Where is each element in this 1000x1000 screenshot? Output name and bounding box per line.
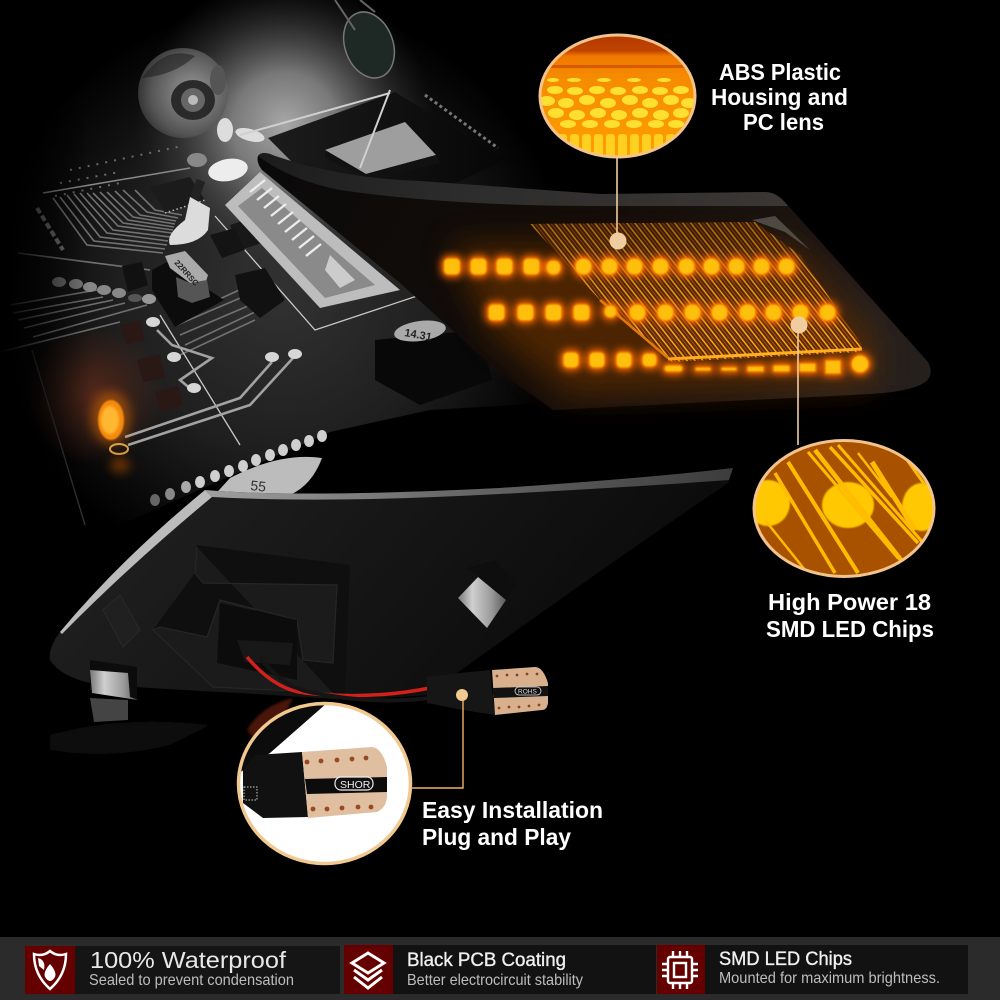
large IC with comb: [225, 172, 400, 308]
callout: LED chip zoom: [752, 439, 936, 578]
amber ambient glow: [450, 245, 875, 395]
"14.31" crystal: 14.31: [403, 327, 433, 344]
label: Easy Installation: Plug and Play: [422, 824, 571, 850]
top lamp: front with amber LEDs: [258, 153, 931, 410]
callout line: plug: [411, 689, 468, 788]
side marker strip: [37, 208, 63, 250]
feature: PCB: Better electrocircuit stability: [407, 972, 583, 989]
icon: chip: [662, 951, 698, 989]
chevron traces: [18, 190, 182, 270]
upper band: [258, 153, 788, 206]
circuit board background photo: [0, 0, 600, 560]
robot: [138, 48, 266, 245]
feature: SMD: [657, 945, 968, 994]
black mask below board: [120, 400, 600, 560]
crystal: [152, 251, 224, 327]
LED chips: [444, 259, 868, 373]
callout line: housing: [610, 157, 626, 250]
cables and upper chip: [240, 0, 498, 180]
small amber LED on board: [91, 391, 131, 473]
feature: SMD: Mounted for maximum brightness.: [719, 970, 940, 987]
small components: [120, 215, 492, 412]
crystal: 22RRSC: [173, 258, 200, 288]
lower traces: [0, 286, 255, 355]
label: ABS Plastic: PC lens: [743, 109, 824, 135]
left tab: [103, 595, 140, 647]
feature: waterproof: [25, 946, 340, 994]
feature: SMD: SMD LED Chips: [719, 949, 852, 970]
dark plate under chip: [268, 92, 505, 195]
feature: waterproof: 100% Waterproof: [90, 947, 287, 973]
wire harness: [247, 657, 430, 700]
trace to LED: [125, 330, 293, 445]
lower metal clip: [90, 670, 138, 722]
rear lamp housing: [50, 468, 733, 754]
callout: plug zoom: SHOR: [340, 779, 371, 791]
feature: waterproof: Sealed to prevent condensation: [89, 972, 294, 989]
connector block: [153, 545, 350, 695]
label: High Power 18: SMD LED Chips: [766, 616, 934, 642]
label tag "55": [210, 457, 322, 500]
row of pads: [150, 430, 327, 506]
clip holder: [90, 660, 137, 700]
feature: PCB: Black PCB Coating: [407, 950, 566, 971]
label: High Power 18: [766, 589, 934, 642]
feature bar: [0, 937, 1000, 1000]
callout: ABS housing zoom: [535, 30, 700, 160]
light edge: [205, 468, 733, 500]
T10 plug and RoHS board: [427, 667, 548, 715]
solder pads: [52, 277, 302, 393]
label tag "55": 55: [250, 477, 267, 495]
label: ABS Plastic: [711, 59, 848, 135]
icon: layers: [352, 953, 384, 988]
pin rows: [55, 146, 182, 196]
faint reflection: [50, 722, 210, 754]
label: Easy Installation: Easy Installation: [422, 797, 603, 823]
small SOIC chip: [150, 177, 205, 213]
label: High Power 18: High Power 18: [768, 589, 931, 615]
label: ABS Plastic: ABS Plastic: [719, 59, 841, 85]
ribbed lens: [530, 216, 888, 362]
callout: plug zoom: [232, 700, 410, 864]
T10 plug and RoHS board: ROHS: [518, 688, 537, 696]
label: ABS Plastic: Housing and: [711, 84, 848, 110]
right metal clip: [458, 560, 516, 628]
label: Easy Installation: [422, 797, 603, 850]
feature: PCB: [344, 945, 656, 994]
"14.31" crystal: [393, 317, 447, 345]
callout line: LED chips: [790, 316, 808, 445]
icon: shield: [34, 951, 66, 989]
